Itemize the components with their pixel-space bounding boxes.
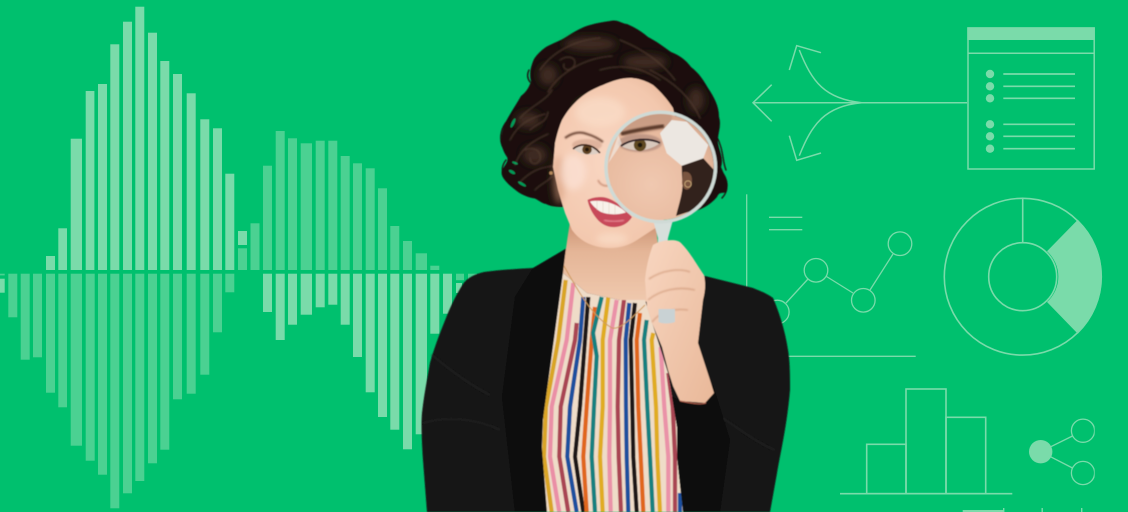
- mouth: [588, 197, 632, 227]
- cuff trim: [680, 401, 706, 404]
- jaw shade: [553, 156, 565, 204]
- bars: second cluster upper: [238, 131, 489, 280]
- magnifying glass: [604, 110, 718, 243]
- jacket folds: [423, 310, 775, 450]
- jacket: [422, 248, 790, 512]
- bars: second cluster lower: [263, 274, 462, 449]
- jacket sleeve over blouse: [668, 373, 730, 512]
- left eyebrow: [565, 133, 603, 142]
- hair strands: [510, 38, 700, 190]
- hair: [501, 21, 727, 214]
- icon: cropped chart at bottom edge: [963, 508, 1082, 512]
- lens eyebrow: [621, 126, 664, 134]
- hair gaps: [508, 118, 527, 187]
- icon: share nodes: [1029, 419, 1095, 485]
- lens left glare: [608, 135, 622, 163]
- forehead highlight: [575, 97, 625, 127]
- list bullets: [986, 70, 994, 153]
- lens forehead shade: [620, 114, 672, 136]
- magnifier handle: [653, 220, 673, 246]
- left lapel: [502, 248, 567, 512]
- left eye: [572, 139, 602, 155]
- hand and forearm: [645, 240, 714, 404]
- lens: [608, 114, 714, 221]
- neck: [563, 220, 660, 302]
- chin highlight: [596, 233, 628, 245]
- face: [549, 78, 690, 248]
- lens eye: [618, 134, 662, 152]
- chart: audio waveform bars: [0, 7, 489, 508]
- chart: donut: [944, 198, 1102, 355]
- finger creases: [648, 270, 695, 322]
- donut highlighted wedge: [1047, 220, 1102, 334]
- necklace: [564, 266, 645, 328]
- hair highlights: [516, 37, 704, 164]
- magnifier handle end: [658, 309, 675, 324]
- striped blouse: [542, 266, 683, 512]
- stray curls: [501, 70, 727, 198]
- figure: woman holding magnifier: [422, 21, 790, 512]
- lens ear: [682, 172, 692, 190]
- bars: first cluster lower: [0, 274, 234, 508]
- earring: [549, 171, 553, 175]
- chart: bar outline: [840, 389, 1012, 494]
- bars: first cluster upper: [0, 7, 247, 293]
- icon: document list: [967, 27, 1095, 169]
- list lines: [1003, 74, 1075, 149]
- lens glare: [660, 120, 708, 166]
- icon: branching arrow: [753, 46, 967, 160]
- cheek highlight: [560, 154, 586, 190]
- lens rim: [606, 112, 716, 222]
- document header: [967, 27, 1095, 40]
- chart: line graph: [747, 194, 916, 356]
- lens earring: [685, 181, 691, 187]
- nose shadow: [598, 180, 612, 186]
- lens dark hair reflection: [676, 158, 714, 216]
